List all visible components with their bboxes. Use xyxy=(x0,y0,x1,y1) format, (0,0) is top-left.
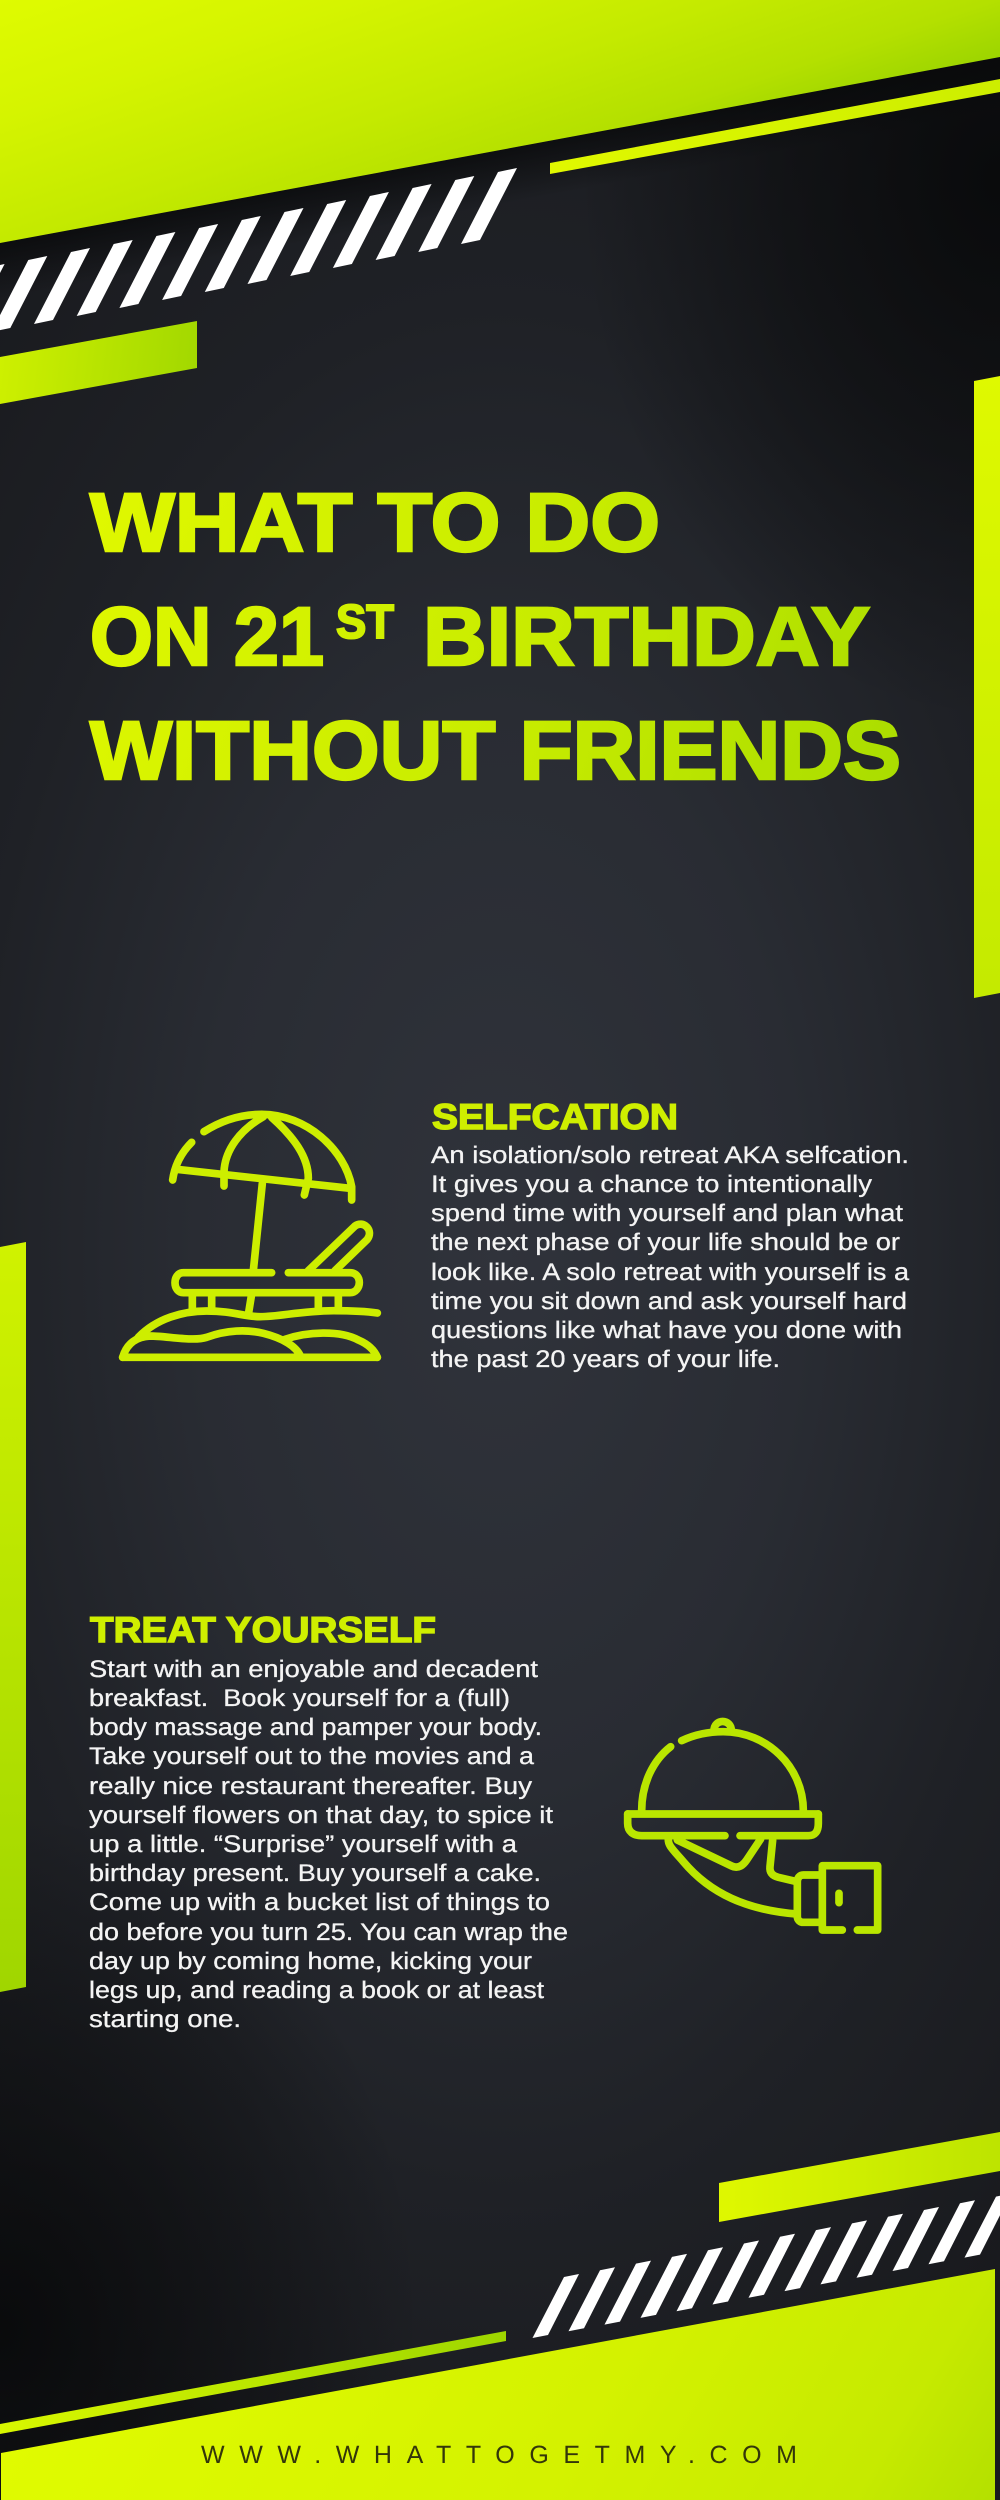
bottom white hazard stripes xyxy=(532,2194,1000,2338)
treat yourself body text: legs up, and reading a book or at least xyxy=(89,1977,544,2004)
treat yourself body text: Come up with a bucket list of things to xyxy=(89,1889,550,1916)
treat yourself body text: starting one. xyxy=(89,2006,241,2033)
selfcation body text: time you sit down and ask yourself hard xyxy=(431,1288,907,1315)
treat yourself body text: day up by coming home, kicking your xyxy=(89,1948,532,1975)
bottom accent line xyxy=(0,2331,506,2434)
title xyxy=(90,476,901,797)
title: BIRTHDAY xyxy=(423,590,870,683)
top left green bar xyxy=(0,321,197,404)
top accent line xyxy=(550,79,1000,174)
treat yourself body text: Start with an enjoyable and decadent xyxy=(89,1656,538,1683)
treat yourself body text: body massage and pamper your body. xyxy=(89,1714,542,1741)
top white hazard stripes xyxy=(0,168,517,340)
right side green bar xyxy=(974,376,1000,998)
footer website url: WWW.WHATTOGETMY.COM xyxy=(201,2441,797,2469)
selfcation body text: look like. A solo retreat with yourself is a xyxy=(431,1259,910,1286)
icon: beach umbrella and lounger xyxy=(123,1114,377,1357)
treat yourself body text: do before you turn 25. You can wrap the xyxy=(89,1919,568,1946)
bottom green banner xyxy=(1,2269,995,2500)
title: WITHOUT FRIENDS xyxy=(90,704,901,797)
treat yourself heading: TREAT YOURSELF xyxy=(90,1609,436,1650)
top green banner xyxy=(0,0,1000,243)
treat yourself body text xyxy=(89,1656,568,2033)
treat yourself body text: birthday present. Buy yourself a cake. xyxy=(89,1860,541,1887)
treat yourself body text: up a little. “Surprise” yourself with a xyxy=(89,1831,518,1858)
icon: serving hand with cloche xyxy=(628,1721,878,1930)
bottom right green block xyxy=(719,2132,1000,2222)
treat yourself body text: yourself flowers on that day, to spice it xyxy=(89,1802,553,1829)
title: ON 21 xyxy=(90,590,324,683)
selfcation body text: An isolation/solo retreat AKA selfcation. xyxy=(431,1142,909,1169)
title: ST xyxy=(336,596,394,649)
selfcation body text: spend time with yourself and plan what xyxy=(431,1200,903,1227)
selfcation body text: the next phase of your life should be or xyxy=(431,1229,900,1256)
treat yourself body text: breakfast. Book yourself for a (full) xyxy=(89,1685,510,1712)
selfcation body text: questions like what have you done with xyxy=(431,1317,902,1344)
title: WHAT TO DO xyxy=(90,476,660,569)
selfcation body text: the past 20 years of your life. xyxy=(431,1346,780,1373)
treat yourself body text: Take yourself out to the movies and a xyxy=(89,1743,535,1770)
left side green bar xyxy=(0,1242,26,1992)
selfcation body text: It gives you a chance to intentionally xyxy=(431,1171,872,1198)
selfcation body text xyxy=(431,1142,910,1373)
selfcation heading: SELFCATION xyxy=(432,1096,678,1137)
treat yourself body text: really nice restaurant thereafter. Buy xyxy=(89,1773,532,1800)
